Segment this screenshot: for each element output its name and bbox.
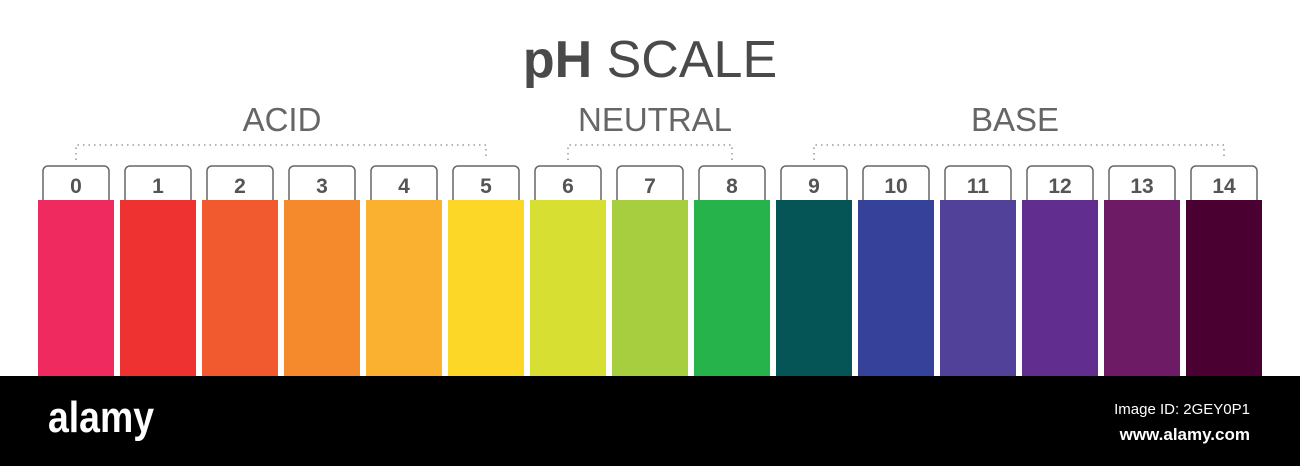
ph scale bars: 2 [234,175,246,198]
heading: neutral: NEUTRAL [578,101,732,138]
ph scale bars: 14 [1212,175,1236,198]
ph scale bars: 10 [884,175,908,198]
heading: base: BASE [971,101,1059,138]
footer bar [0,376,1300,466]
bracket: base [814,145,1224,160]
ph scale bars: 13 [1130,175,1154,198]
ph scale bars: 3 [316,175,328,198]
bracket: neutral [568,145,732,160]
heading: acid: ACID [243,101,321,138]
ph scale bars: 4 [398,175,410,198]
bracket: acid [76,145,486,160]
ph scale bars: 8 [726,175,738,198]
ph scale bars: 12 [1048,175,1072,198]
logo: alamy: alamy [48,392,154,442]
website: www.alamy.com [1119,425,1250,444]
ph scale bars: 6 [562,175,574,198]
ph scale bars: 1 [152,175,164,198]
ph scale bars: 11 [967,175,989,198]
ph scale bars: 9 [808,175,820,198]
ph scale bars: 0 [70,175,82,198]
title: pH SCALE [523,31,777,89]
ph scale bars [38,166,1262,376]
ph scale bars: 7 [644,175,656,198]
ph scale bars: 5 [480,175,492,198]
image id: Image ID: 2GEY0P1 [1114,401,1250,418]
